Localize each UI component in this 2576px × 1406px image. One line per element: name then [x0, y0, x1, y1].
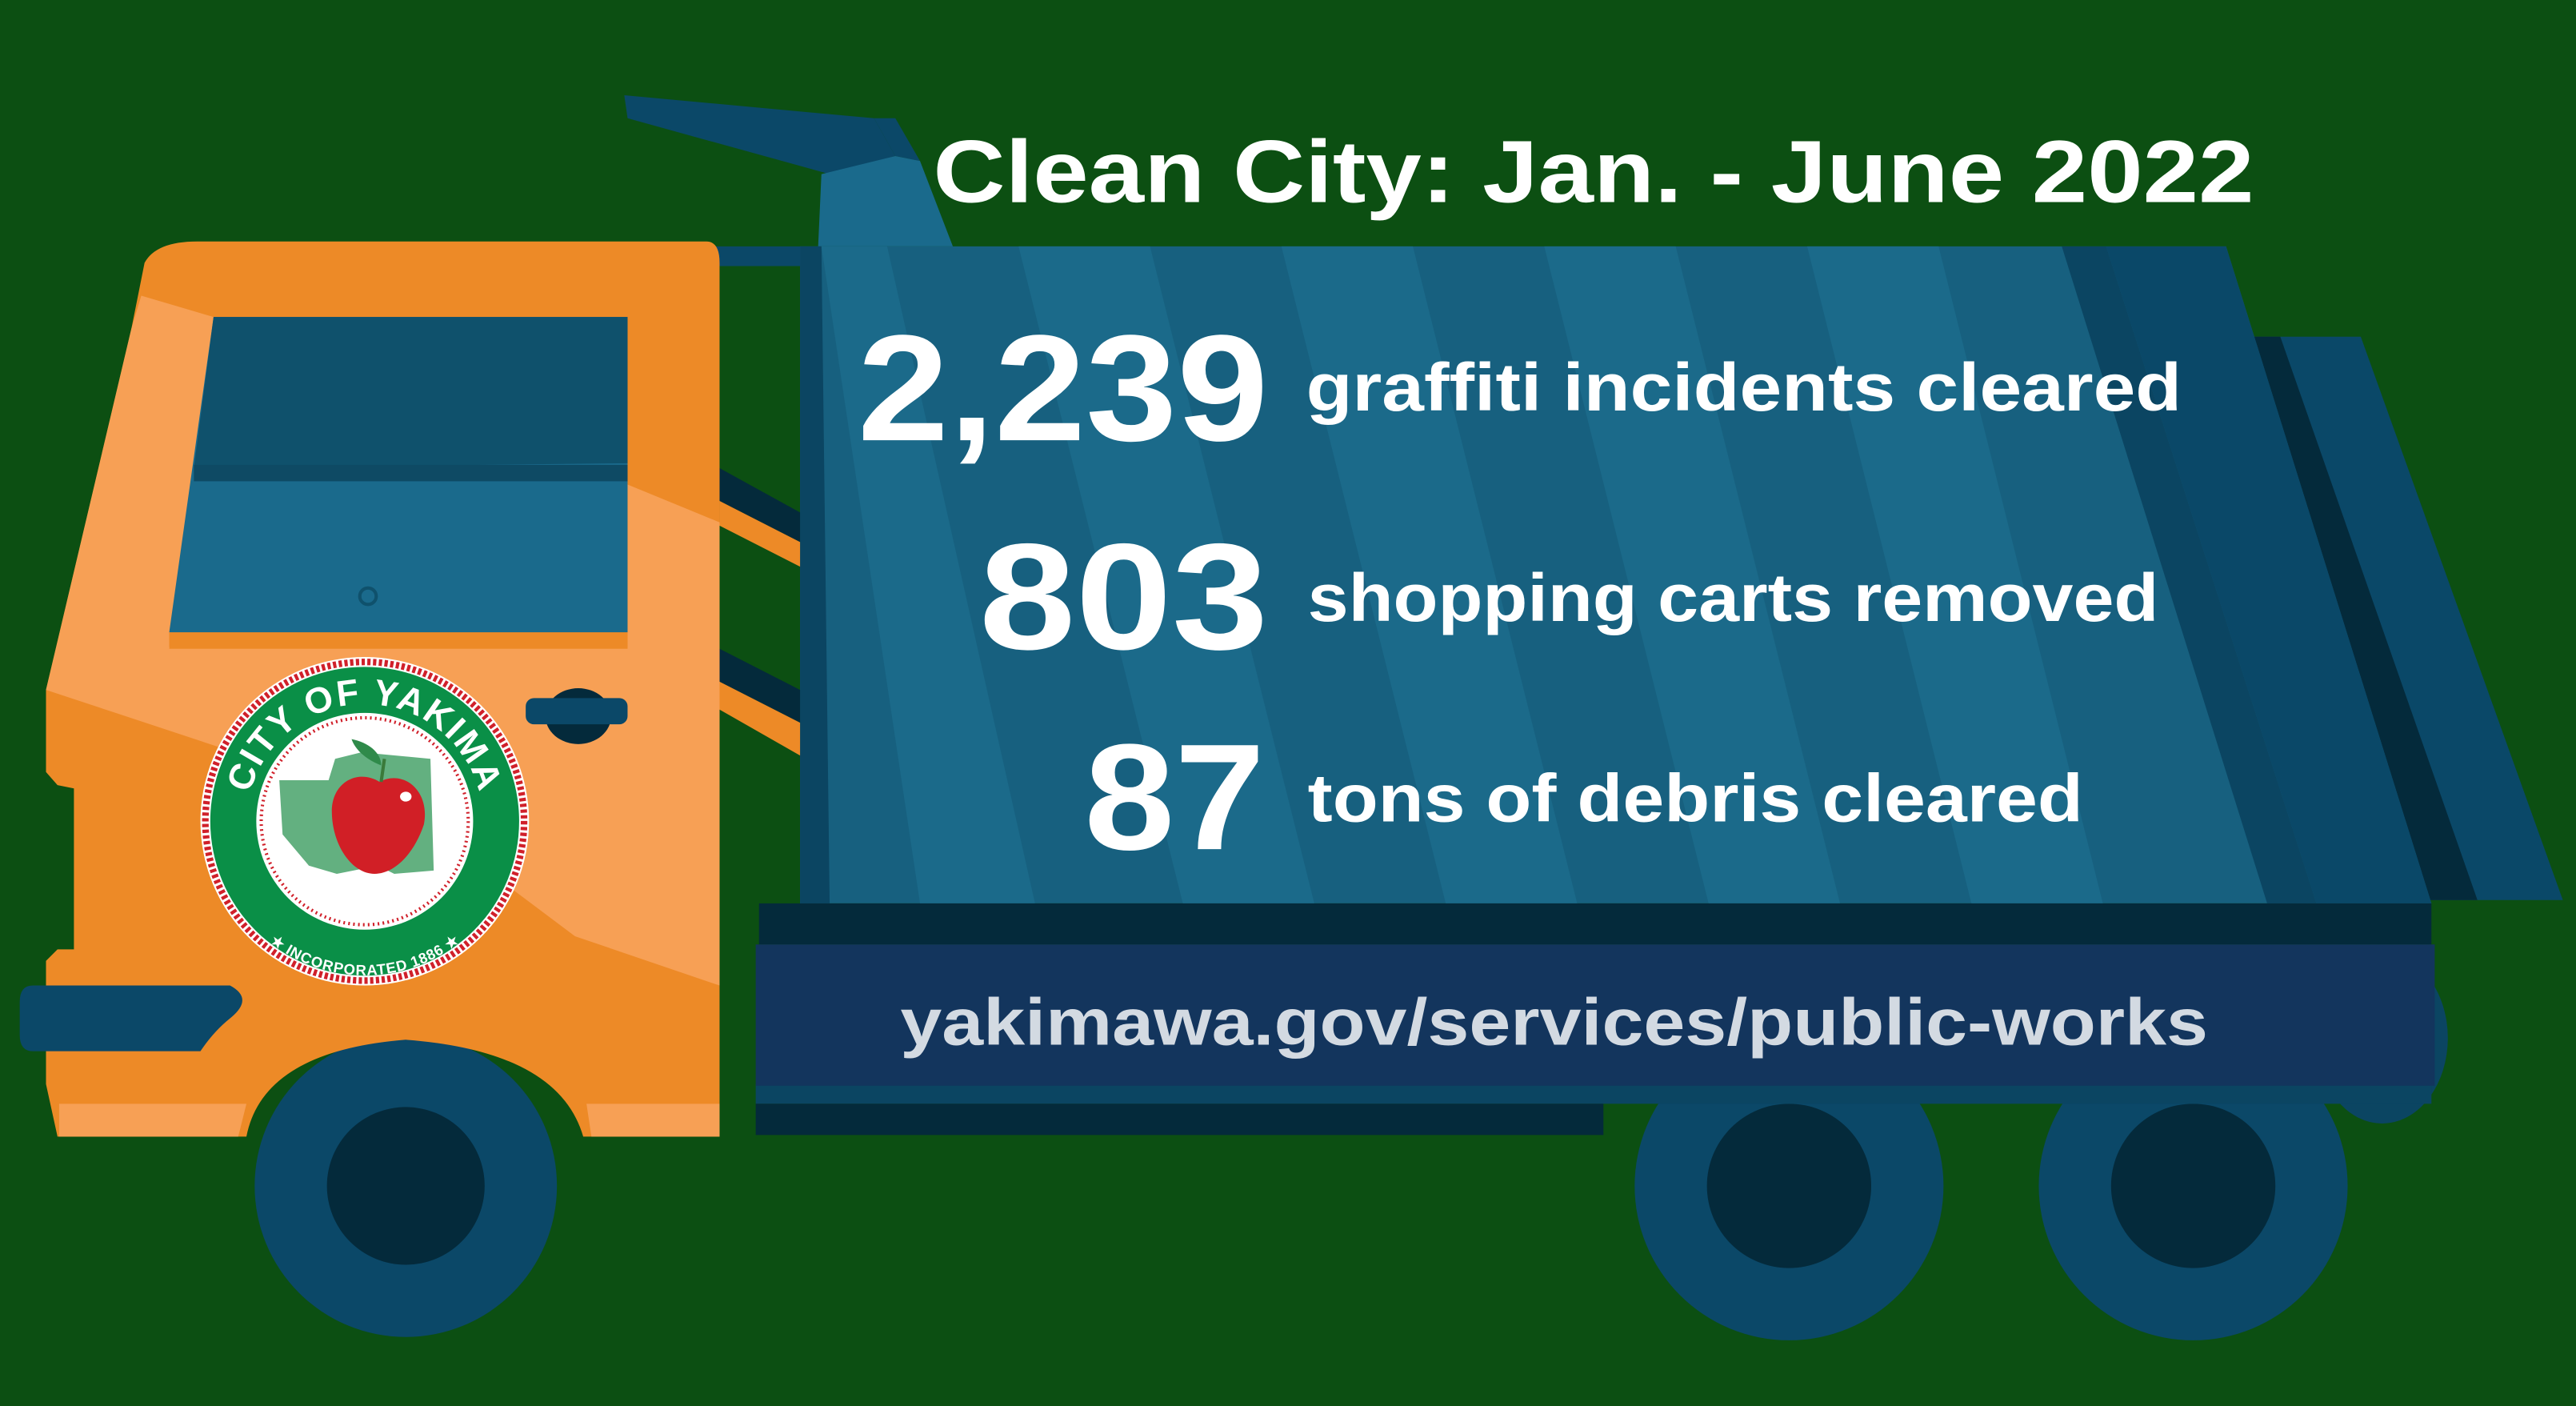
title: Clean City: Jan. - June 2022 [933, 122, 2254, 221]
chassis bands [756, 903, 2431, 1135]
stat: debris: 87 [1084, 713, 1265, 882]
url bar: yakimawa.gov/services/public-works [900, 986, 2208, 1059]
truck body with stripes [800, 246, 2431, 903]
stat: shopping carts: 803 [979, 513, 1268, 682]
url bar [756, 944, 2434, 1086]
city seal: CITY OF YAKIMA [229, 679, 499, 791]
stat: debris [1084, 713, 2083, 882]
stat: shopping carts: shopping carts removed [1308, 560, 2158, 635]
door handle [546, 688, 611, 744]
stat: graffiti: graffiti incidents cleared [1306, 350, 2182, 425]
stat: graffiti [858, 304, 2182, 473]
rear body layer [2136, 337, 2563, 900]
exhaust stack [624, 95, 953, 266]
city seal [200, 657, 530, 986]
window [170, 317, 627, 632]
state map and apple [279, 752, 434, 874]
city seal: ★ INCORPORATED 1886 ★ [272, 936, 458, 975]
stat: graffiti: 2,239 [858, 304, 1268, 473]
stat: shopping carts [979, 513, 2158, 682]
cab [20, 242, 719, 1136]
cab wheel [254, 1035, 557, 1337]
rear wheels [1634, 952, 2448, 1340]
bumper [20, 986, 242, 1051]
connectors between cab and body [719, 468, 800, 755]
stat: debris: tons of debris cleared [1308, 760, 2083, 835]
